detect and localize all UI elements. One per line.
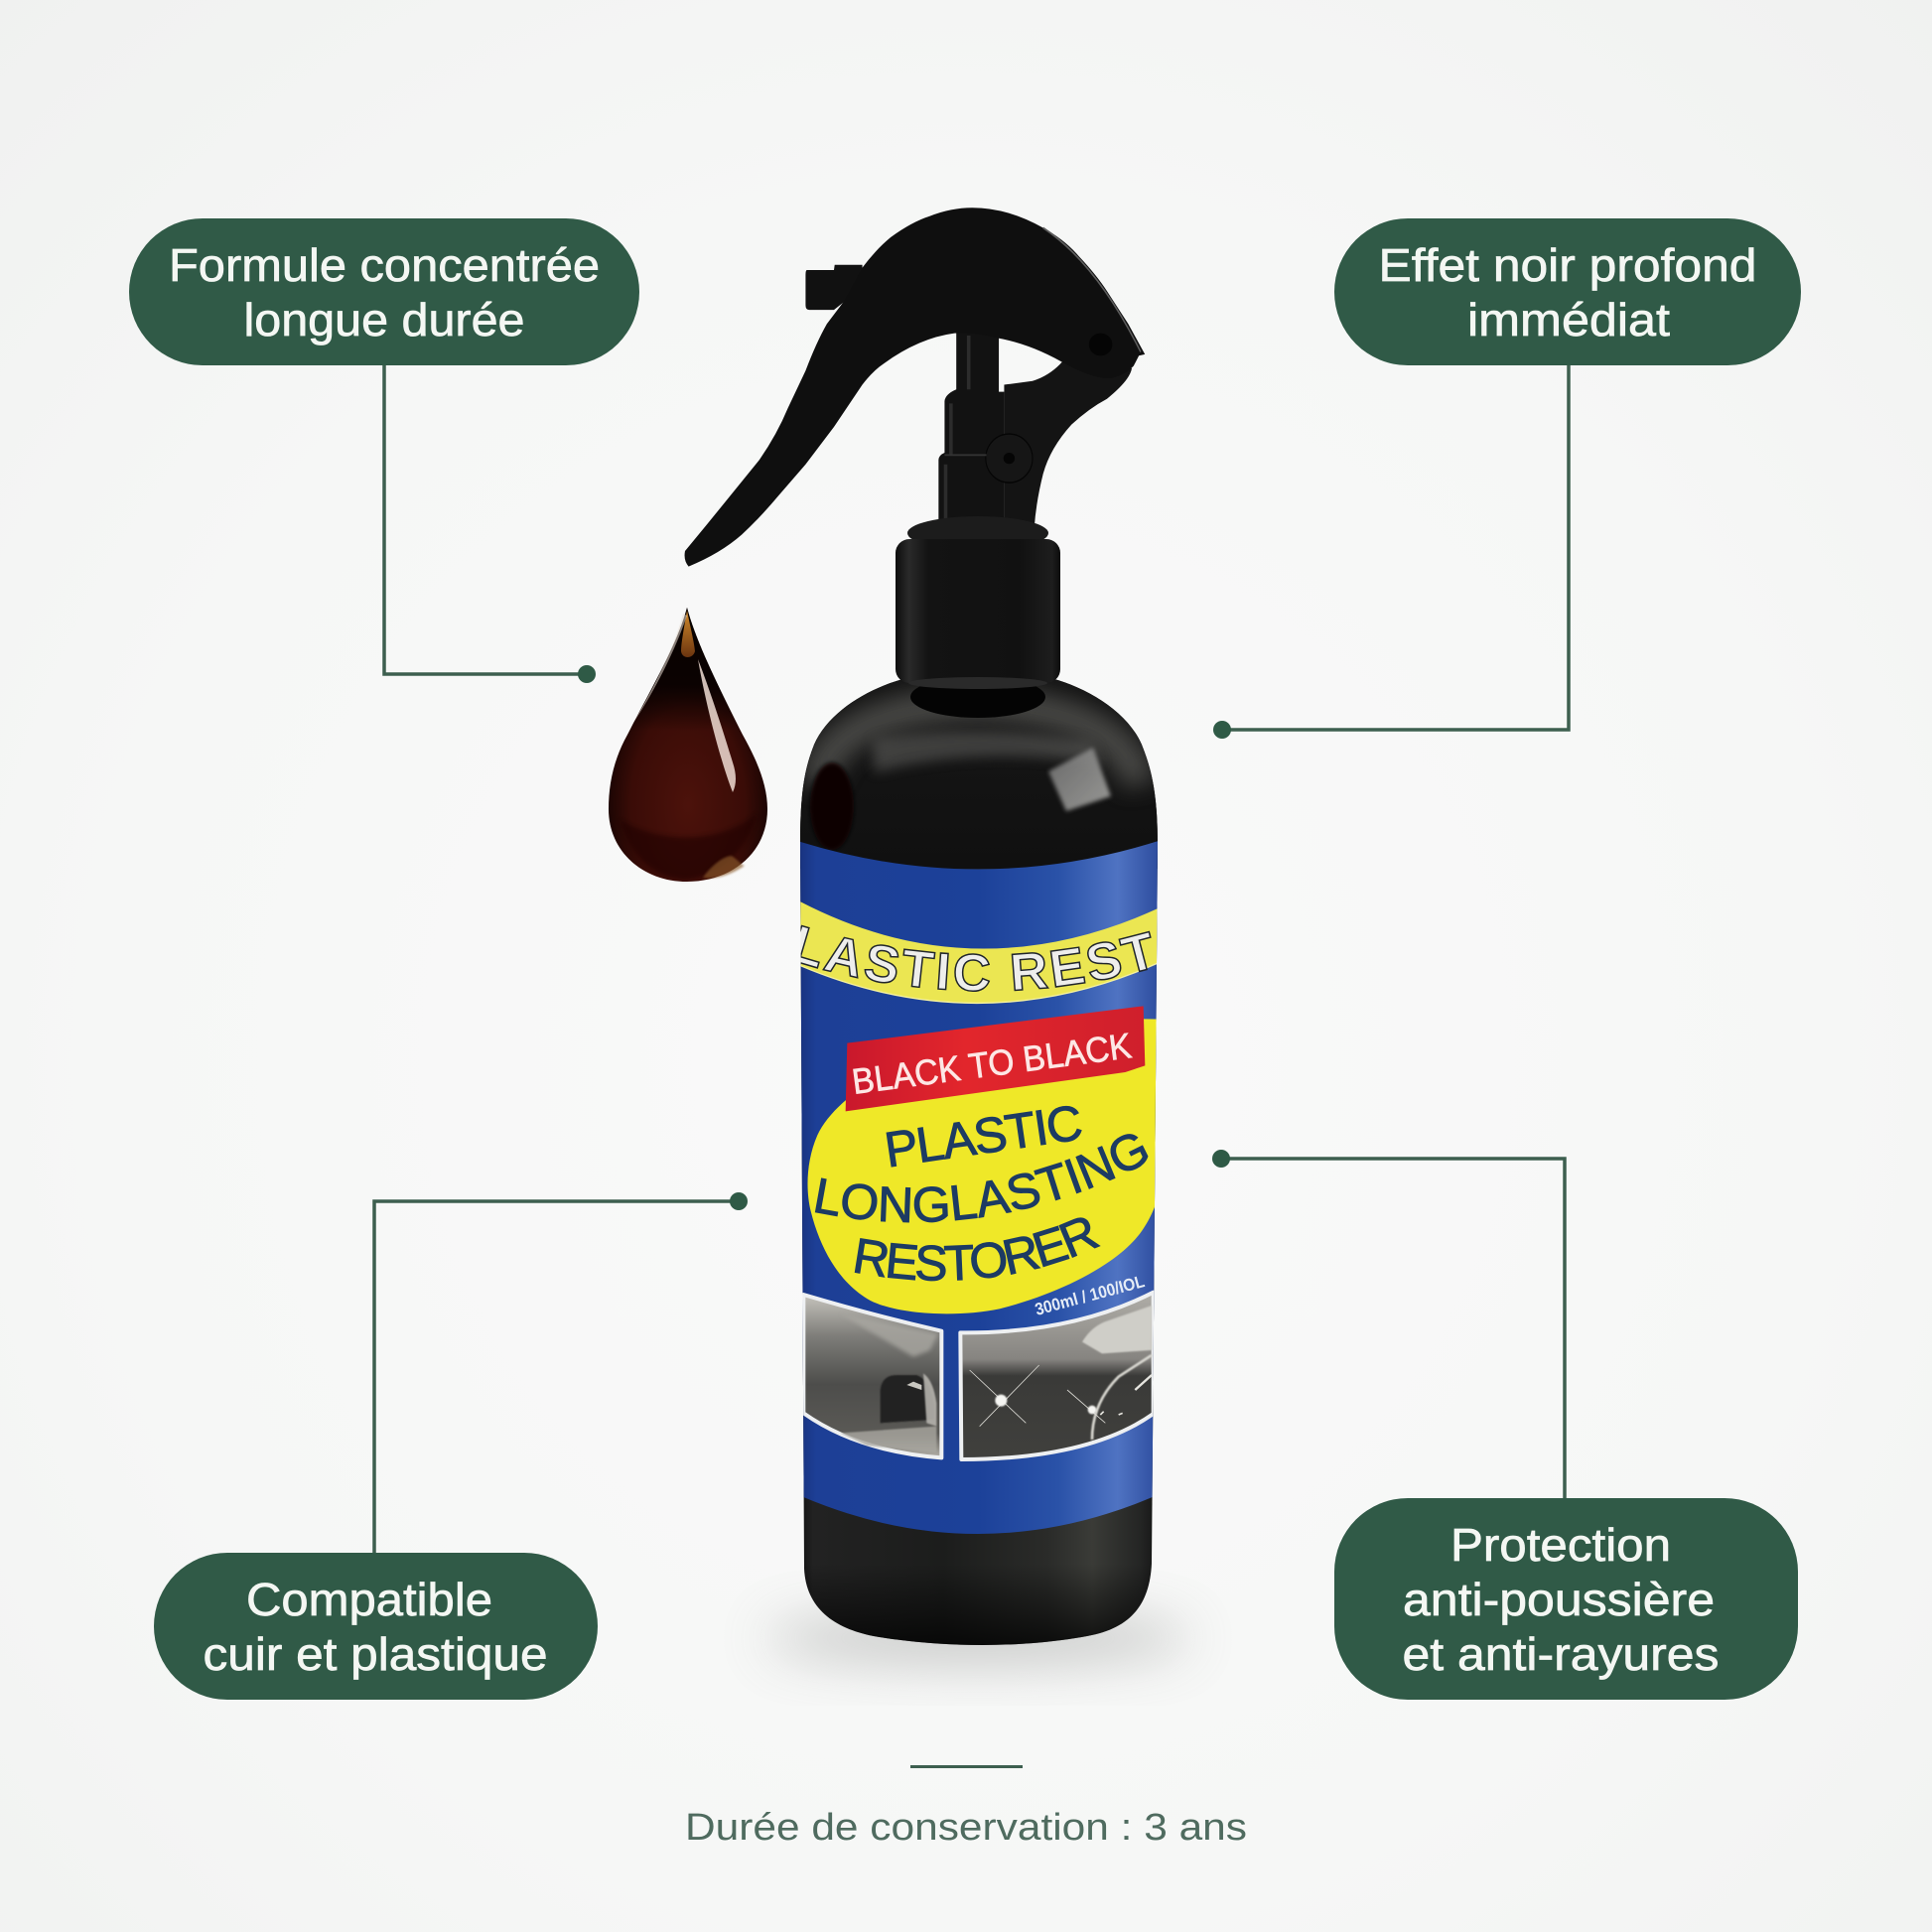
callout: effet noir profond immédiat: Effet noir profond: [1378, 239, 1757, 291]
sparkles: [970, 1365, 1105, 1427]
product name: RESTORER: [854, 1217, 1101, 1281]
footer: shelf life note: Durée de conservation : 3 ans: [685, 1807, 1247, 1849]
callout: compatible cuir et plastique: [154, 1553, 598, 1700]
photo: dashboard vent: [803, 1295, 941, 1457]
oil drop: [609, 608, 767, 882]
front label artwork: BLACK TO BLACK: [850, 1025, 1134, 1102]
volume text: 300ml / 100/IOL: [1033, 1271, 1147, 1319]
callout: protection anti-poussière et anti-rayures: et anti-rayures: [1402, 1628, 1720, 1680]
bottle cap: [896, 539, 1060, 689]
spray head: [685, 207, 1145, 567]
product name: PLASTIC: [882, 1094, 1085, 1178]
callout: protection anti-poussière et anti-rayures: [1334, 1498, 1798, 1700]
lower body darkening: [805, 1579, 1150, 1645]
product bottle: [685, 207, 1158, 1645]
callout: compatible cuir et plastique: Compatible: [246, 1574, 492, 1625]
trigger: [685, 207, 1145, 567]
photo: shining dashboard: [960, 1293, 1154, 1459]
bottle body: [800, 679, 1158, 1645]
callout: formule concentrée longue durée: [129, 218, 639, 365]
callout: compatible cuir et plastique: cuir et plastique: [203, 1628, 548, 1680]
yellow band: [794, 898, 1162, 1003]
connector: protection: [1212, 1150, 1565, 1500]
bottle shadow: [764, 1612, 1191, 1664]
connector: effet noir profond: [1213, 363, 1569, 739]
pivot disc: [986, 434, 1033, 483]
nozzle: [805, 265, 863, 310]
callout: formule concentrée longue durée: Formule concentrée: [169, 239, 600, 291]
connector: compatible: [374, 1192, 748, 1555]
callout: effet noir profond immédiat: immédiat: [1467, 294, 1670, 345]
label photos: [803, 1293, 1154, 1459]
connector: formule concentrée: [384, 363, 596, 683]
blue label: [794, 840, 1162, 1534]
flange: [907, 516, 1048, 550]
footer: shelf life note: [685, 1765, 1247, 1849]
product name: LONGLASTING: [814, 1134, 1148, 1223]
callout: formule concentrée longue durée: longue durée: [244, 294, 524, 345]
band title: LASTIC REST: [800, 925, 1152, 992]
shoulder reflections: [816, 703, 1140, 784]
collar highlight: [945, 336, 969, 523]
callout: protection anti-poussière et anti-rayures: anti-poussière: [1403, 1574, 1715, 1625]
callout: effet noir profond immédiat: [1334, 218, 1801, 365]
front label artwork: [800, 901, 1158, 1314]
callout: protection anti-poussière et anti-rayures: Protection: [1450, 1519, 1671, 1571]
red banner: [846, 1006, 1145, 1111]
rear arm: [1004, 361, 1132, 527]
stem and collars: [938, 331, 1004, 525]
yellow oval: [807, 1019, 1164, 1313]
product name: [814, 1106, 1148, 1281]
